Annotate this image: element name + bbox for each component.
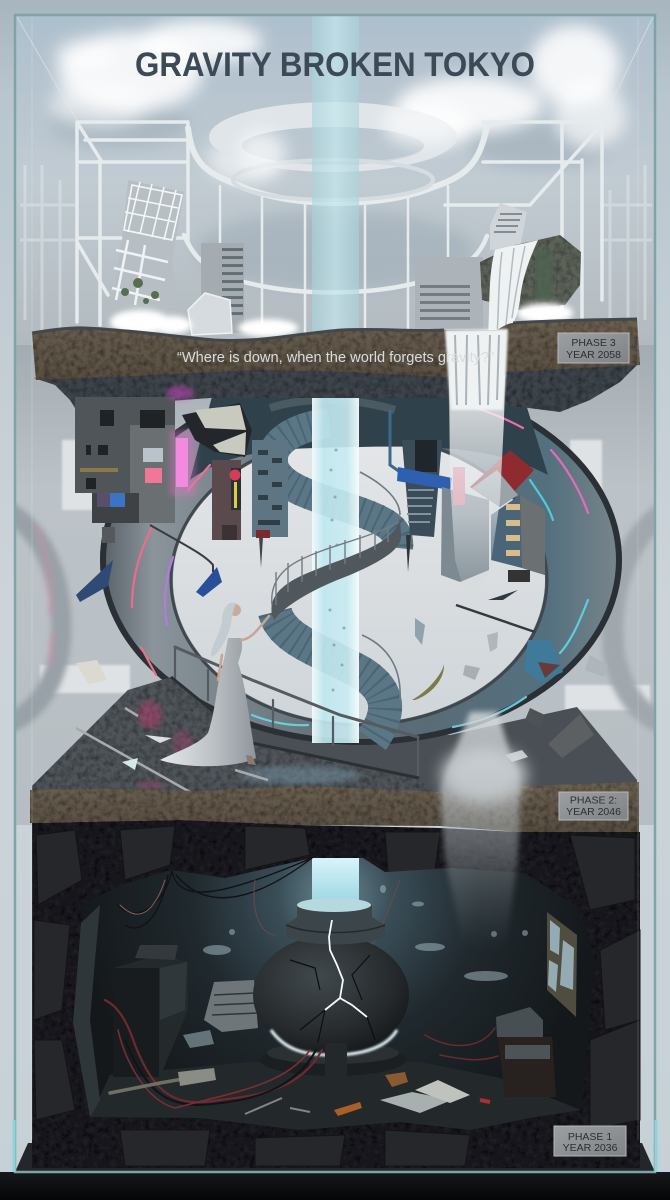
reflected ring left: [0, 505, 61, 728]
display base: [0, 1143, 670, 1200]
plaque: phase 2: PHASE 2:: [570, 794, 617, 806]
plaque: phase 3: [558, 333, 629, 363]
clouds: [50, 20, 626, 184]
white frame structure: [77, 122, 602, 335]
panel: underground level (Phase 1): [32, 820, 640, 1168]
road sign on pole: [150, 525, 213, 572]
ring road: [100, 419, 622, 745]
rock blocks: [34, 826, 640, 1166]
lower soil slab: [30, 782, 639, 832]
power switch: [325, 1043, 347, 1098]
title: GRAVITY BROKEN TOKYO: [135, 46, 535, 84]
light beam: upper: [312, 15, 359, 333]
left cave wall: [73, 905, 100, 1117]
hanging cables: [118, 858, 400, 945]
front stair ribbon: [271, 518, 401, 620]
beam: lower: [312, 858, 359, 913]
floating rock island: [480, 235, 581, 310]
plaque: phase 1: PHASE 1: [568, 1131, 612, 1143]
wall pinboard: [547, 912, 577, 1017]
ground cloud puffs: [110, 303, 573, 337]
falling debris: [76, 560, 608, 700]
car highlights: [195, 405, 246, 455]
top soil slab: [32, 319, 640, 380]
sky backdrop: [15, 15, 655, 345]
plaque: phase 2: YEAR 2046: [566, 806, 621, 818]
hanging towers centre-left: [212, 440, 288, 568]
hanging tower grey: [441, 487, 489, 582]
road marking: [76, 708, 268, 792]
neon glow magenta: [166, 386, 194, 400]
upper waterfall: [488, 240, 538, 336]
cracked egg reactor: [253, 935, 409, 1055]
reactor collar: [286, 898, 385, 944]
front floor: [32, 677, 440, 796]
reactor base: [260, 1042, 406, 1076]
ring hole sky: [173, 437, 545, 723]
power strip: [178, 1068, 216, 1086]
scattered papers and tools: [183, 1030, 490, 1116]
tool crates right: [496, 1007, 556, 1097]
stair railing: [175, 647, 418, 776]
neon sign pink: [170, 430, 196, 496]
waterfall through upper slab: [449, 375, 505, 610]
hanging tower lit windows: [491, 495, 545, 582]
blue street sign: [397, 467, 452, 490]
plaque: phase 3: PHASE 3: [571, 337, 616, 349]
chamber floor: [90, 1062, 581, 1130]
rock mass: [32, 820, 640, 1168]
glowing crack: [325, 920, 367, 1017]
yellow lantern sign: [230, 468, 241, 510]
pink vertical sign: [453, 467, 465, 505]
rail curb: [171, 677, 419, 778]
reflected ring right: [613, 505, 670, 730]
panel: middle level (Phase 2): [0, 345, 670, 825]
cloud shadows: [50, 103, 610, 290]
wet floor reflections: [138, 701, 360, 790]
halo ring: [209, 102, 457, 200]
waterfall mist at lower slab: [440, 712, 526, 950]
plaque: phase 3: YEAR 2058: [566, 349, 621, 361]
back stairs: [270, 400, 400, 740]
plaque: phase 1: [554, 1126, 626, 1156]
light beam: middle: [312, 398, 359, 743]
floor debris right: [122, 708, 594, 770]
side wire frames: [20, 165, 652, 330]
power cables: [105, 1000, 498, 1108]
woman in white gown: [160, 603, 269, 766]
white side patches: [40, 440, 650, 710]
mist backdrop: [15, 345, 655, 825]
red truck: [470, 450, 534, 507]
road top band: [190, 398, 548, 480]
quote: “Where is down, when the world forgets gravity?”: [177, 349, 494, 366]
panel: top sky level (Phase 3): [15, 15, 655, 345]
hanging towers centre-right: [390, 410, 442, 572]
hanging building cluster left: [75, 397, 175, 543]
upside-down car: [182, 403, 252, 457]
neon road strips: [132, 403, 588, 727]
cave chamber: [73, 858, 594, 1130]
cloud veil over halo: [238, 100, 467, 174]
paper stack: [204, 980, 258, 1032]
white tower blocks: [201, 203, 527, 333]
floor base: [32, 690, 637, 796]
tilted glass tower: [112, 180, 184, 318]
floating water droplets: [203, 885, 528, 981]
plaque: phase 2: [559, 792, 628, 820]
waterfall over slab: [445, 329, 508, 410]
crystal shard: [188, 293, 232, 335]
underside rock: [34, 360, 637, 412]
plaque: phase 1: YEAR 2036: [563, 1142, 618, 1154]
left equipment cabinet: [113, 945, 188, 1077]
